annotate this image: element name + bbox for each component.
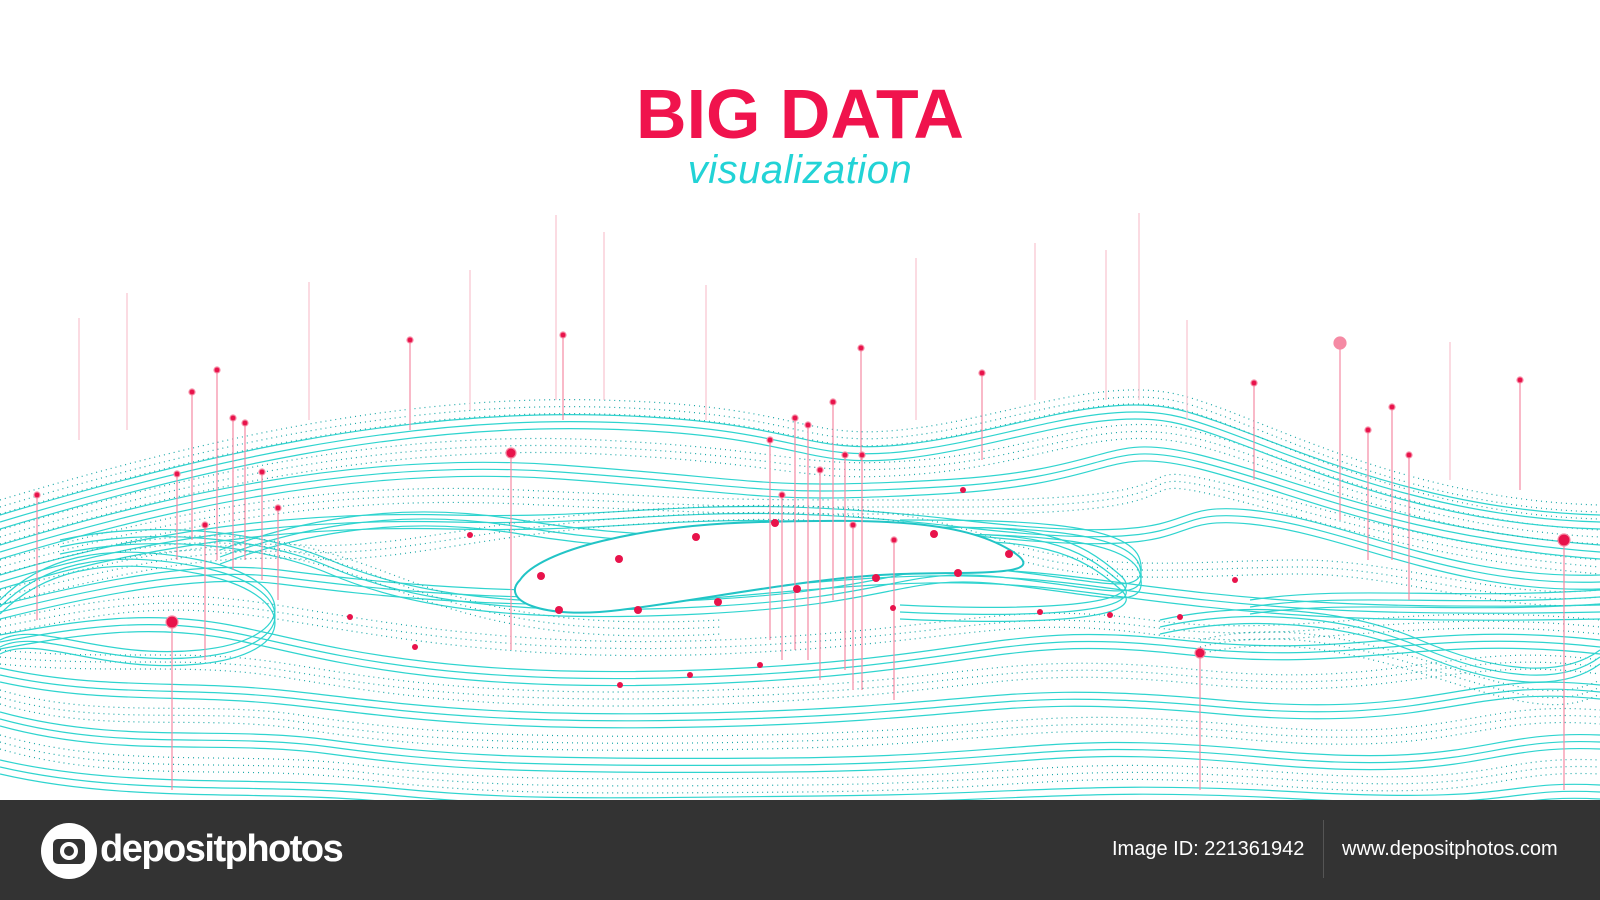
pins	[34, 213, 1570, 790]
subtitle: visualization	[688, 148, 912, 192]
title: BIG DATA	[636, 75, 964, 153]
scattered dots	[347, 487, 1238, 688]
icon: camera	[41, 823, 97, 879]
website: www.depositphotos.com	[1342, 838, 1558, 860]
image id: Image ID: 221361942	[1112, 838, 1304, 860]
wave visualization	[0, 213, 1600, 800]
footer bar	[0, 800, 1600, 900]
logo text: depositphotos	[100, 828, 342, 870]
logo	[41, 823, 342, 879]
inner loop	[515, 521, 1023, 613]
